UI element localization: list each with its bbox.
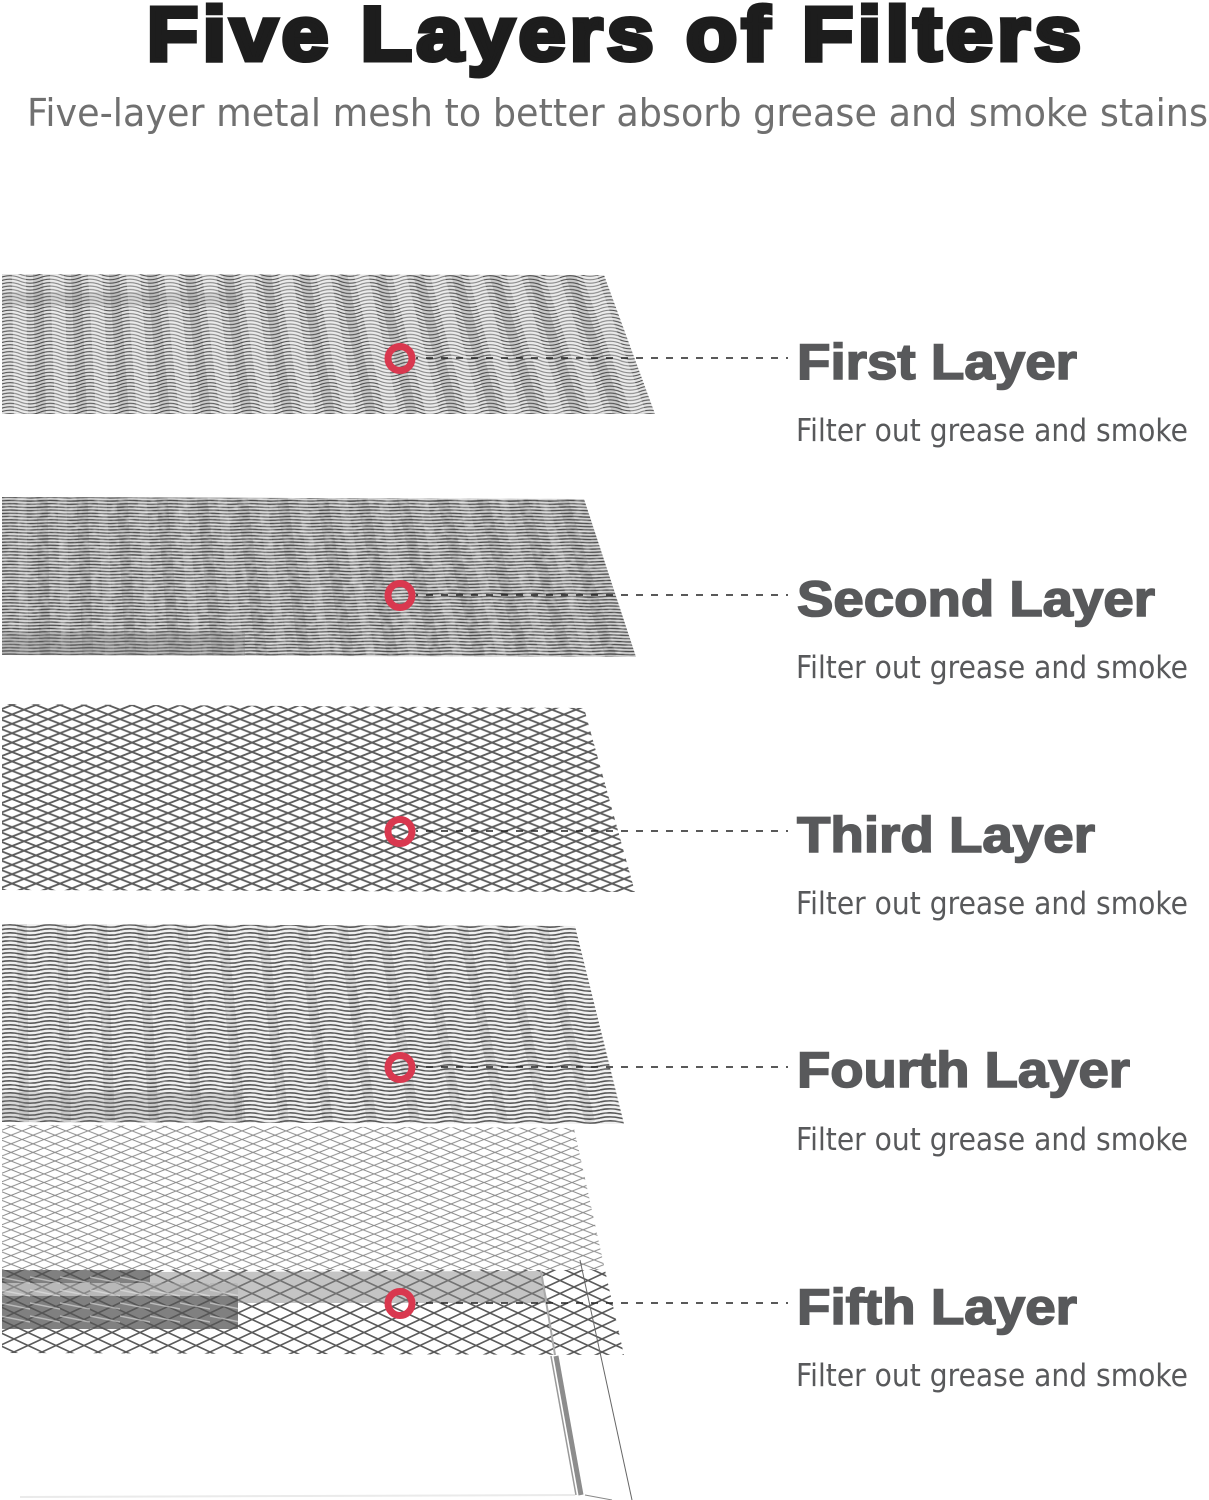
mesh: fourth layer: [0, 922, 630, 1126]
mesh: third layer: [2, 704, 635, 892]
callout: fifth layer: [388, 1279, 1188, 1394]
callout: fourth layer: [388, 1042, 1188, 1158]
mesh: fifth layer: [2, 1125, 624, 1355]
callout: second layer: Second Layer: [797, 571, 1155, 627]
overlap panel under the mesh: [2, 1270, 548, 1329]
frame edges below the filter: [20, 1260, 632, 1500]
callout: first layer: [388, 334, 1188, 449]
callout: fifth layer: Fifth Layer: [797, 1279, 1077, 1335]
mesh: second layer: [0, 495, 640, 660]
callout: first layer: First Layer: [797, 334, 1077, 390]
callout: second layer: [388, 571, 1188, 686]
callout: fourth layer: Fourth Layer: [797, 1042, 1130, 1098]
callout: third layer: [388, 807, 1188, 922]
callout: third layer: Third Layer: [797, 807, 1095, 863]
mesh: first layer: [2, 274, 655, 414]
